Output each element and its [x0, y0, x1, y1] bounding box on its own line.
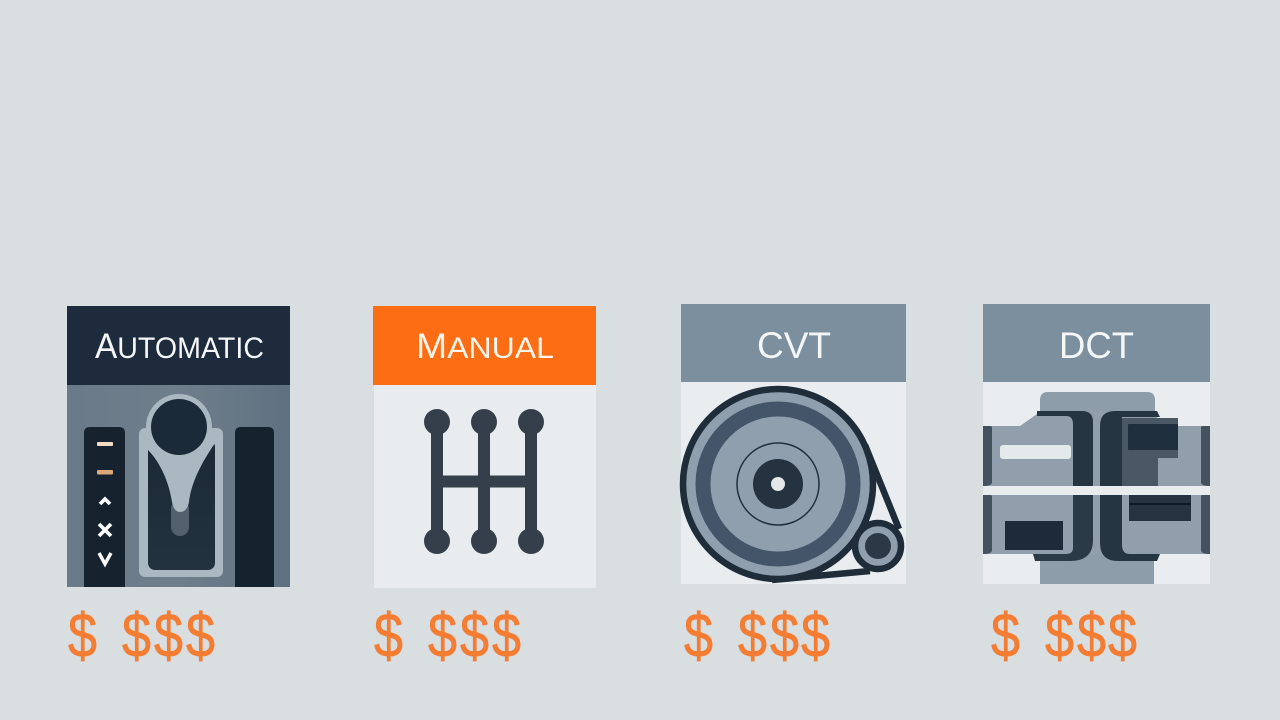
- price rating: manual: [374, 602, 521, 671]
- price rating: DCT: $: [991, 602, 1020, 671]
- icon: dual clutch cross-section: [983, 392, 1210, 584]
- manual header: [373, 306, 596, 385]
- icon: right slot: [235, 427, 274, 587]
- panel: automatic: [67, 306, 290, 587]
- panel: DCT: [983, 304, 1210, 584]
- price rating: manual: $: [428, 602, 457, 671]
- automatic header: [67, 306, 290, 385]
- price rating: CVT: $: [684, 602, 713, 671]
- price rating: CVT: $: [770, 602, 799, 671]
- price rating: CVT: [684, 602, 830, 671]
- panel: manual: [373, 306, 596, 588]
- price rating: manual: $: [374, 602, 403, 671]
- DCT header: [983, 304, 1210, 382]
- automatic heading: AUTOMATIC: [95, 327, 264, 366]
- CVT header: [681, 304, 906, 382]
- price rating: CVT: $: [738, 602, 767, 671]
- DCT panel body: [983, 382, 1210, 584]
- price rating: DCT: $: [1077, 602, 1106, 671]
- price rating: CVT: $: [801, 602, 830, 671]
- price rating: DCT: $: [1045, 602, 1074, 671]
- icon: gear indicator strip: [84, 427, 125, 587]
- icon: H-pattern gear shift: [424, 409, 544, 554]
- CVT panel body: [681, 382, 906, 584]
- DCT heading: DCT: [1059, 325, 1134, 366]
- icon: CVT pulleys and belt: [683, 389, 901, 580]
- icon: gear shifter: [139, 394, 223, 577]
- manual heading: MANUAL: [416, 327, 554, 366]
- automatic panel body: [67, 385, 290, 587]
- price rating: automatic: $: [122, 602, 151, 671]
- price rating: manual: $: [460, 602, 489, 671]
- panel: CVT: [681, 304, 906, 584]
- price rating: DCT: $: [1108, 602, 1137, 671]
- price rating: automatic: $: [154, 602, 183, 671]
- price rating: manual: $: [492, 602, 521, 671]
- price rating: DCT: [991, 602, 1137, 671]
- CVT heading: CVT: [757, 325, 831, 366]
- price rating: automatic: $: [186, 602, 215, 671]
- manual panel body: [374, 385, 596, 588]
- price rating: automatic: $: [68, 602, 97, 671]
- price rating: automatic: [68, 602, 215, 671]
